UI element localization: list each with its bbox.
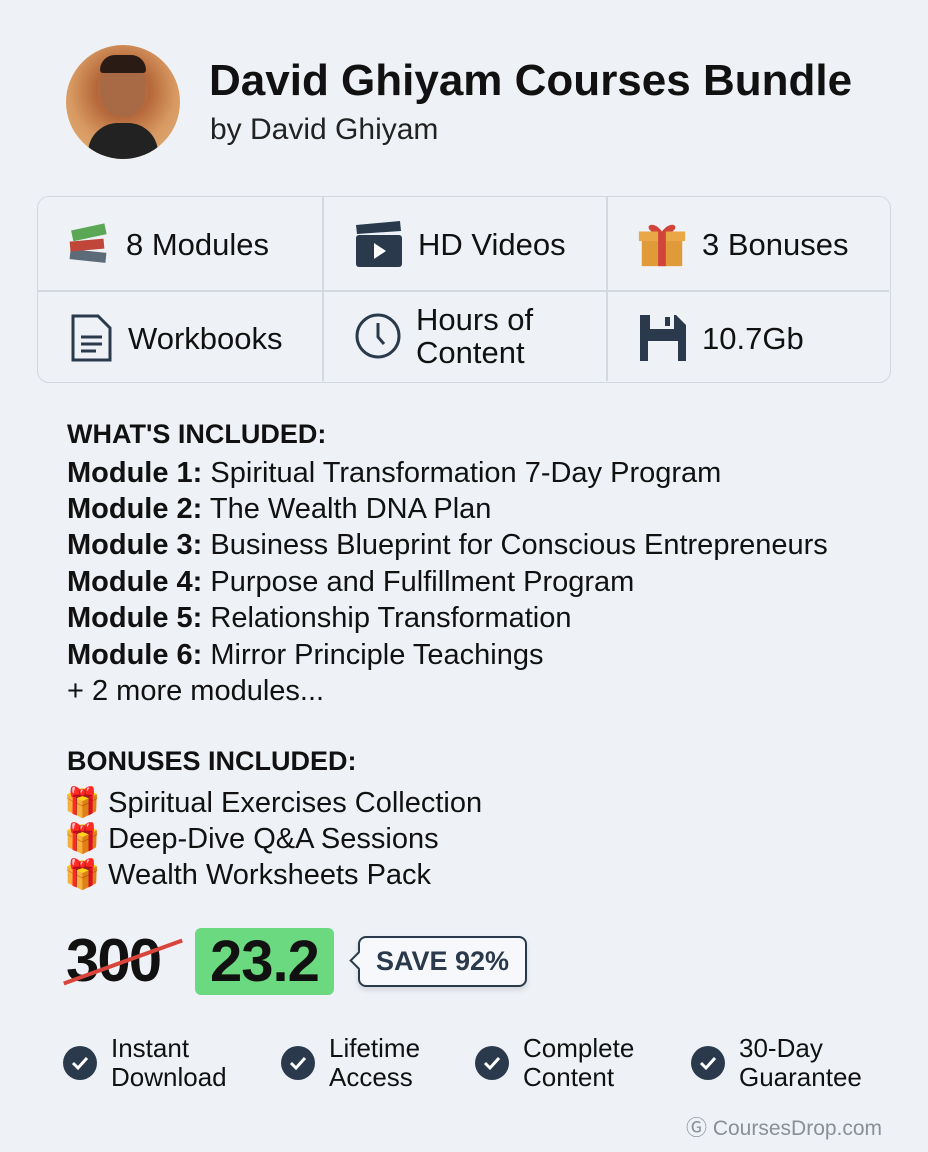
features: Complete	[523, 1033, 634, 1063]
features: Instant	[111, 1033, 189, 1063]
bonus list: 🎁 Deep-Dive Q&A Sessions	[64, 823, 439, 855]
features: Access	[329, 1062, 413, 1092]
bonus list: 🎁 Wealth Worksheets Pack	[64, 859, 431, 891]
features: Guarantee	[739, 1062, 862, 1092]
subtitle: by David Ghiyam	[210, 113, 438, 146]
module list: Module 5: Relationship Transformation	[67, 602, 571, 634]
stat: size: 10.7Gb	[702, 320, 804, 356]
stats grid	[37, 196, 891, 383]
save badge	[358, 936, 527, 987]
module list	[67, 457, 828, 707]
features	[63, 1033, 862, 1092]
features: Content	[523, 1062, 614, 1092]
bonus list: 🎁 Spiritual Exercises Collection	[64, 787, 482, 819]
stat: hours: Content	[416, 335, 525, 370]
stat: hours	[356, 302, 534, 370]
module list: Module 6: Mirror Principle Teachings	[67, 639, 544, 671]
new price: 23.2	[210, 929, 319, 994]
module list: Module 1: Spiritual Transformation 7-Day Program	[67, 457, 721, 489]
stat: workbooks: Workbooks	[128, 320, 282, 356]
stat: modules	[70, 223, 269, 263]
title: David Ghiyam Courses Bundle	[209, 56, 852, 105]
bonuses heading: BONUSES INCLUDED:	[67, 746, 357, 776]
features: 30-Day	[739, 1033, 823, 1063]
stat: bonuses: 3 Bonuses	[702, 226, 848, 262]
avatar	[66, 45, 180, 159]
module list: Module 4: Purpose and Fulfillment Program	[67, 566, 634, 598]
save badge: SAVE 92%	[376, 946, 509, 976]
bonus list	[64, 786, 482, 891]
footer watermark: Ⓖ CoursesDrop.com	[686, 1117, 882, 1140]
stat: workbooks	[72, 314, 282, 362]
what's included heading: WHAT'S INCLUDED:	[67, 419, 326, 449]
old price: 300	[66, 927, 160, 994]
features: Lifetime	[329, 1033, 420, 1063]
features: Download	[111, 1062, 227, 1092]
stat: size	[640, 315, 804, 361]
module list: + 2 more modules...	[67, 675, 324, 707]
stat: bonuses	[638, 224, 848, 266]
module list: Module 3: Business Blueprint for Conscious Entrepreneurs	[67, 529, 828, 561]
stat: videos: HD Videos	[418, 226, 566, 262]
stat: videos	[356, 221, 566, 267]
module list: Module 2: The Wealth DNA Plan	[67, 493, 491, 525]
stat: hours: Hours of	[416, 302, 533, 337]
stat: modules: 8 Modules	[126, 226, 269, 262]
